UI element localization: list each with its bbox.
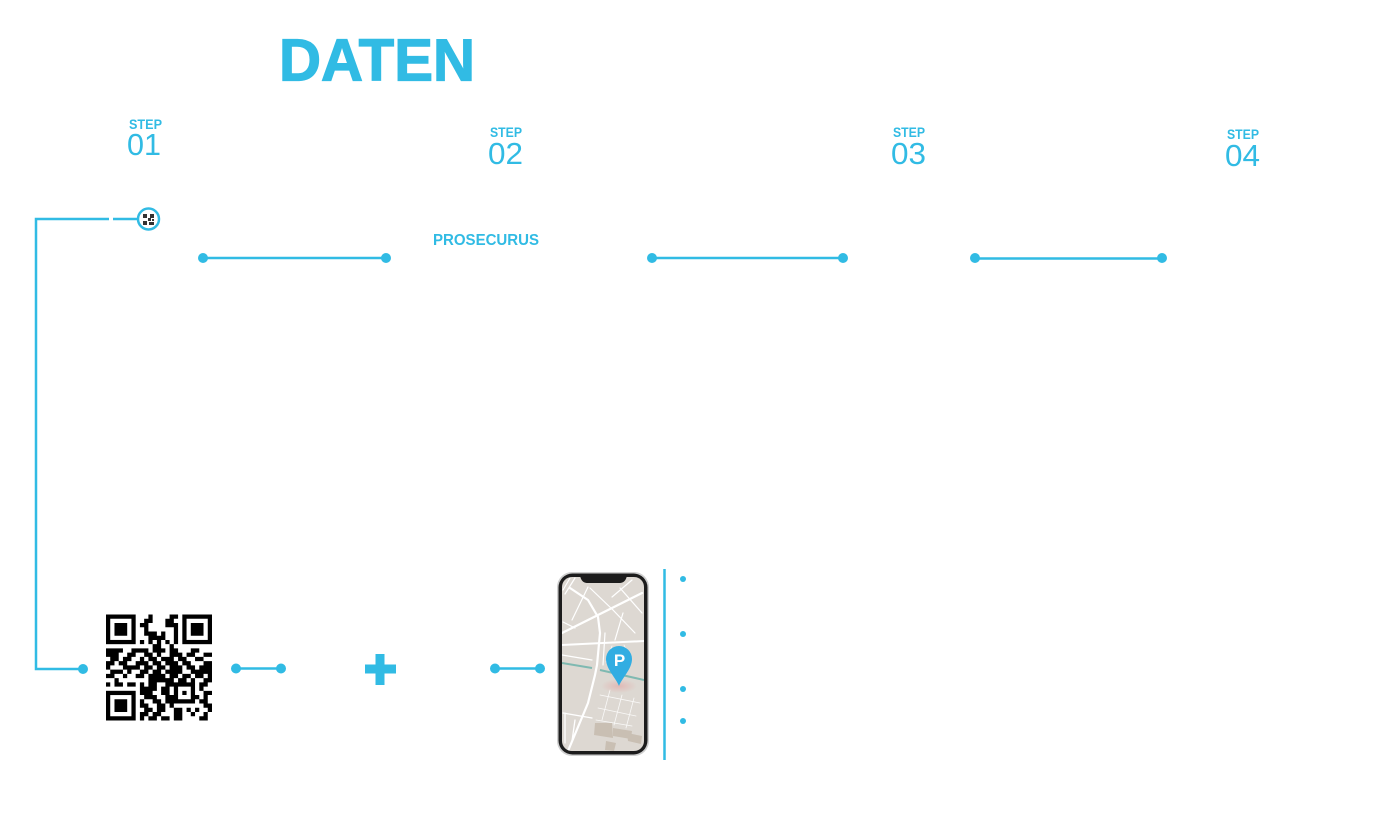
step 01 label: 01 (127, 127, 161, 162)
step 01 label: STEP (129, 117, 162, 132)
phone notch (580, 576, 627, 583)
map pin: P (614, 651, 625, 670)
step 04 label: STEP (1227, 127, 1259, 142)
connector: step 02 to 03 (647, 253, 848, 263)
step 02 label: STEP (490, 125, 522, 140)
connector: plus to phone (490, 664, 545, 674)
label: Prosecurus: PROSECURUS (433, 232, 539, 249)
connector: step 03 to 04 (970, 253, 1167, 263)
connector: QR code to plus (231, 664, 286, 674)
step 04 label: 04 (1225, 138, 1260, 173)
divider with bullet list (664, 569, 686, 760)
arrow: connector from step 01 to QR code (36, 219, 109, 674)
icon: smartphone with parking map (557, 572, 649, 756)
QR code (106, 614, 212, 720)
title: DATEN (279, 28, 475, 94)
icon: plus (365, 654, 396, 685)
step 02 label: 02 (488, 136, 523, 171)
step 03 label: STEP (893, 125, 925, 140)
map pin (606, 646, 632, 686)
connector: step 01 to 02 (198, 253, 391, 263)
step 03 label: 03 (891, 136, 926, 171)
icon: small QR badge (113, 208, 159, 230)
